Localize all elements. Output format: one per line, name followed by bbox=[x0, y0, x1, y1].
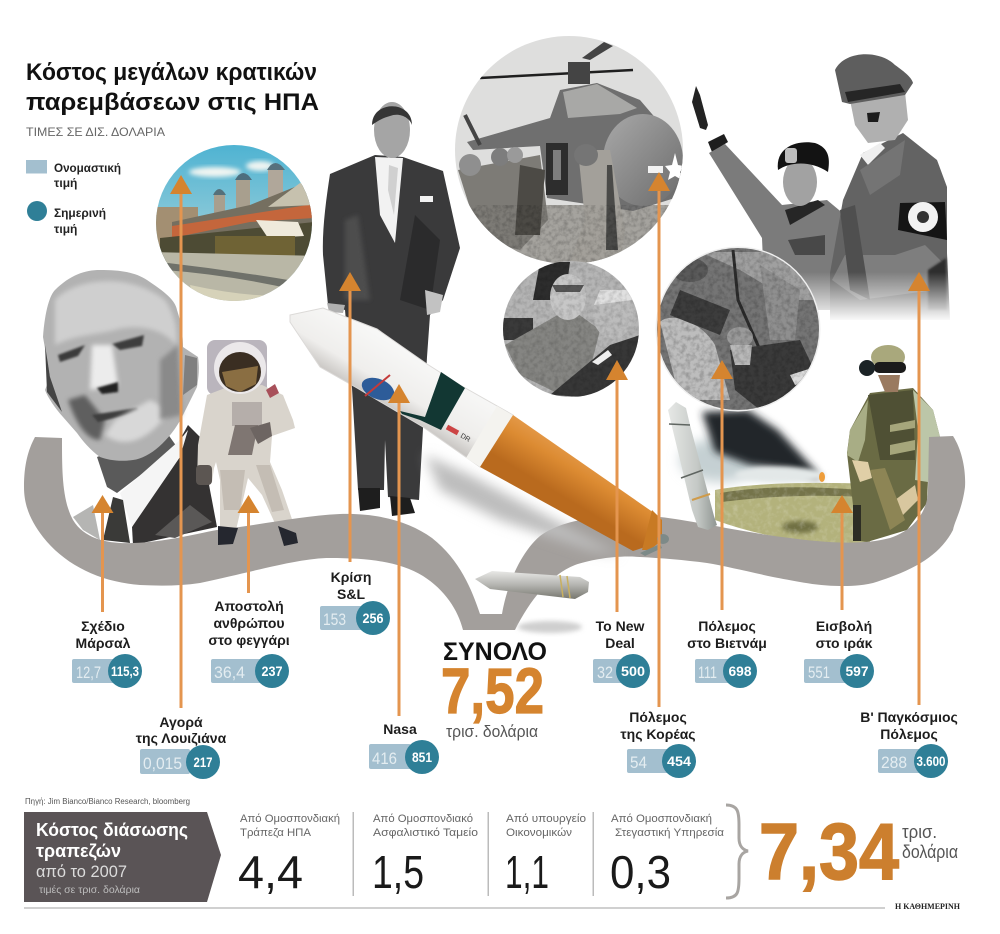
item: Moon mission: ανθρώπου bbox=[213, 615, 285, 631]
panel: bank bailout label: Κόστος διάσωσης bbox=[36, 820, 188, 840]
Reagan shoes over band bbox=[358, 488, 415, 516]
publisher credit: Η ΚΑΘΗΜΕΡΙΝΗ bbox=[895, 902, 961, 911]
panel: bank bailout label bbox=[24, 812, 221, 902]
item: Louisiana Purchase bbox=[136, 714, 227, 779]
legend bbox=[26, 160, 121, 236]
Ares rocket with NASA logo: DR bbox=[459, 433, 471, 444]
title: Κόστος μεγάλων κρατικών bbox=[26, 59, 317, 86]
arrow: Korean War bbox=[648, 172, 670, 707]
legend: Ονομαστική bbox=[54, 161, 121, 175]
total: τρισ. δολάρια bbox=[446, 722, 538, 741]
item: Vietnam War bbox=[687, 618, 767, 688]
Ares rocket with NASA logo bbox=[290, 308, 669, 556]
arrow: New Deal bbox=[606, 360, 628, 612]
source: Πηγή: Jim Bianco/Bianco Research, bloomberg bbox=[25, 797, 190, 806]
rocket shadow bbox=[425, 455, 620, 555]
item: World War II: 3.600 bbox=[916, 753, 946, 769]
item: Marshall Plan: Μάρσαλ bbox=[76, 635, 131, 651]
item: Vietnam War: Πόλεμος bbox=[698, 618, 756, 634]
arrow: Vietnam War bbox=[711, 360, 733, 610]
item: Louisiana Purchase: 0,015 bbox=[143, 754, 182, 773]
stat: Treasury bbox=[505, 813, 586, 898]
stat: FDIC: 1,5 bbox=[372, 846, 424, 898]
stat: FDIC: Ασφαλιστικό Ταμείο bbox=[373, 827, 478, 839]
stat: Treasury: Από υπουργείο bbox=[506, 813, 586, 825]
item: Vietnam War: 111 bbox=[698, 663, 717, 682]
item: World War II: Πόλεμος bbox=[880, 726, 938, 742]
arrow: Louisiana Purchase bbox=[170, 175, 192, 708]
item: Moon mission: 237 bbox=[262, 663, 283, 679]
bailout total: 7,34 bbox=[759, 807, 899, 896]
item: Moon mission bbox=[208, 598, 290, 688]
arrow: Marshall Plan bbox=[92, 495, 114, 612]
stat: Federal Reserve bbox=[238, 813, 340, 898]
arrow: Moon mission bbox=[238, 495, 260, 593]
item: NASA bbox=[369, 721, 439, 774]
item: New Deal bbox=[593, 618, 650, 688]
item: New Deal: Deal bbox=[605, 635, 635, 651]
item: World War II: Β' Παγκόσμιος bbox=[860, 709, 958, 725]
photo: Roosevelt New Deal bbox=[503, 261, 639, 397]
stat: FDIC bbox=[372, 813, 478, 898]
item: Korean War: 54 bbox=[630, 753, 647, 772]
item: S&L crisis: 153 bbox=[323, 610, 346, 629]
stat: Federal Reserve: Από Ομοσπονδιακή bbox=[240, 813, 340, 825]
shadow under band bbox=[518, 621, 582, 633]
title bbox=[26, 59, 319, 116]
item: Korean War: 454 bbox=[667, 753, 691, 769]
photo: helicopter in Korea bbox=[455, 36, 683, 263]
item: Marshall Plan bbox=[72, 618, 142, 688]
stat: Federal Housing: Στεγαστική Υπηρεσία bbox=[615, 827, 725, 839]
item: Korean War bbox=[620, 709, 696, 778]
stat: Federal Housing: 0,3 bbox=[610, 846, 671, 898]
grey curved band bbox=[24, 436, 965, 630]
photo: astronaut bbox=[196, 340, 295, 530]
item: Iraq invasion: Εισβολή bbox=[816, 618, 872, 634]
item: Iraq invasion bbox=[804, 618, 874, 688]
brace bbox=[726, 805, 748, 898]
stat: Federal Housing: Από Ομοσπονδιακή bbox=[611, 813, 712, 825]
total: 7,52 bbox=[441, 655, 544, 727]
legend: τιμή bbox=[54, 176, 77, 190]
item: Moon mission: Αποστολή bbox=[214, 598, 284, 614]
title: παρεμβάσεων στις ΗΠΑ bbox=[26, 89, 319, 116]
item: New Deal: 32 bbox=[597, 663, 613, 682]
photo: Iraq oil smoke and field bbox=[680, 410, 870, 547]
photo: soldier in Iraq bbox=[847, 345, 940, 542]
item: Iraq invasion: στο ιράκ bbox=[816, 635, 873, 651]
item: World War II: 288 bbox=[881, 753, 907, 772]
stat: Treasury: Οικονομικών bbox=[506, 827, 573, 839]
small horizontal rocket bbox=[475, 571, 589, 599]
item: S&L crisis: Κρίση bbox=[331, 569, 371, 585]
arrow: NASA bbox=[388, 384, 410, 716]
panel: bank bailout label: από το 2007 bbox=[36, 862, 127, 881]
item: Korean War: της Κορέας bbox=[620, 726, 696, 742]
fade under dictators bbox=[755, 272, 960, 340]
stat: FDIC: Από Ομοσπονδιακό bbox=[373, 813, 473, 825]
item: NASA: 851 bbox=[412, 749, 432, 765]
stat: Federal Housing bbox=[610, 813, 725, 898]
panel: bank bailout label: τραπεζών bbox=[36, 841, 121, 862]
photo: Vietnam war bbox=[655, 246, 821, 412]
item: Louisiana Purchase: 217 bbox=[194, 754, 213, 770]
bailout total: τρισ. bbox=[902, 822, 937, 842]
arrow: S&L crisis bbox=[339, 272, 361, 562]
arrow: Iraq invasion bbox=[831, 495, 853, 610]
item: Iraq invasion: 551 bbox=[808, 663, 830, 682]
total bbox=[441, 638, 547, 741]
subtitle: ΤΙΜΕΣ ΣΕ ΔΙΣ. ΔΟΛΑΡΙΑ bbox=[26, 127, 165, 139]
item: Marshall Plan: 115,3 bbox=[111, 663, 139, 679]
item: Korean War: Πόλεμος bbox=[629, 709, 687, 725]
arrow: World War II bbox=[908, 272, 930, 705]
item: Vietnam War: στο Βιετνάμ bbox=[687, 635, 767, 651]
item: Marshall Plan: 12,7 bbox=[76, 663, 101, 682]
item: Marshall Plan: Σχέδιο bbox=[81, 618, 125, 634]
total: ΣΥΝΟΛΟ bbox=[443, 638, 547, 666]
small vertical rocket bbox=[668, 402, 717, 530]
item: Louisiana Purchase: Αγορά bbox=[159, 714, 203, 730]
item: NASA: 416 bbox=[372, 749, 397, 768]
stat: Federal Reserve: 4,4 bbox=[238, 846, 303, 898]
item: World War II bbox=[860, 709, 958, 778]
astronaut boots over band bbox=[218, 526, 298, 546]
photo: George Marshall portrait bbox=[43, 270, 217, 545]
item: S&L crisis: 256 bbox=[362, 610, 384, 626]
item: Iraq invasion: 597 bbox=[846, 663, 869, 679]
item: Moon mission: στο φεγγάρι bbox=[208, 632, 290, 648]
legend: Σημερινή bbox=[54, 206, 106, 220]
photo: Ronald Reagan bbox=[323, 102, 460, 500]
photo: Louisiana market bbox=[156, 145, 312, 301]
item: New Deal: 500 bbox=[621, 663, 645, 679]
panel: bank bailout label: τιμές σε τρισ. δολάρια bbox=[39, 884, 140, 896]
item: Vietnam War: 698 bbox=[728, 663, 752, 679]
stat: Federal Reserve: Τράπεζα ΗΠΑ bbox=[240, 827, 312, 839]
item: Louisiana Purchase: της Λουιζιάνα bbox=[136, 730, 227, 746]
item: Moon mission: 36,4 bbox=[214, 663, 245, 682]
stat: Treasury: 1,1 bbox=[505, 846, 549, 898]
photo: Mussolini and Hitler bbox=[692, 54, 950, 320]
item: NASA: Nasa bbox=[383, 721, 417, 737]
legend: τιμή bbox=[54, 222, 77, 236]
item: New Deal: Το New bbox=[596, 618, 644, 634]
bailout total: δολάρια bbox=[902, 842, 958, 862]
item: S&L crisis: S&L bbox=[337, 586, 365, 602]
item: S&L crisis bbox=[320, 569, 390, 635]
